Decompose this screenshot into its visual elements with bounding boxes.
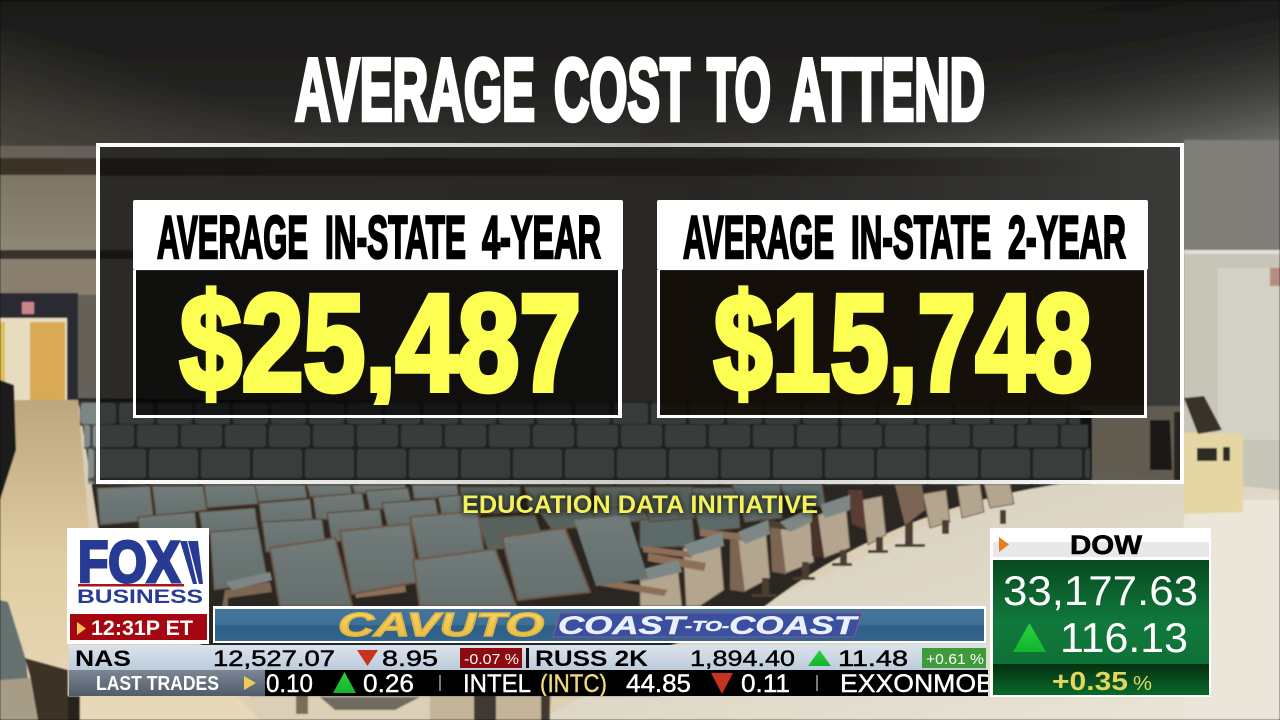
seat arm rests and cushions <box>220 495 850 625</box>
value: Dow percent change <box>1052 666 1152 696</box>
seats: large front rows <box>270 511 648 606</box>
ticker: last trades row: LAST TRADES <box>96 673 219 695</box>
label: average in-state 2-year: IN-STATE <box>851 204 991 271</box>
panel: dark framed overlay <box>96 143 1184 484</box>
main heading: TO <box>707 40 771 139</box>
coast-to-coast pill <box>553 612 862 640</box>
coast-to-coast pill: COAST <box>729 612 860 640</box>
business wordmark: BUSINESS <box>77 587 203 608</box>
seats: grey backs, back rows <box>97 484 825 590</box>
source credit: EDUCATION DATA INITIATIVE <box>462 491 818 519</box>
ticker: index row: 11.48 <box>838 646 908 671</box>
label: average in-state 4-year: 4-YEAR <box>482 204 601 271</box>
label: DOW: DOW <box>1070 530 1143 560</box>
label: average in-state 4-year: IN-STATE <box>325 204 466 271</box>
ticker: last trades row: 0.10 <box>266 670 313 698</box>
ticker: index row: NAS <box>75 646 131 671</box>
main heading: AVERAGE <box>295 40 535 139</box>
panel: in-state 2-year <box>657 200 1148 420</box>
ticker: last trades row: EXXONMOBIL <box>840 670 1016 698</box>
panel: in-state 4-year <box>133 200 623 420</box>
show title banner <box>213 606 986 643</box>
ticker: index row: -0.07 % <box>464 651 519 668</box>
ticker: index row: 12,527.07 <box>213 646 335 671</box>
value: Dow change: 116.13 <box>1060 614 1188 661</box>
ticker: index row: RUSS 2K <box>535 646 648 671</box>
clock bar: 12:31P ET <box>91 617 193 640</box>
panel: Dow index <box>990 528 1211 697</box>
ticker: last trades row: 0.26 <box>363 670 414 698</box>
lectern and laptop <box>1150 396 1243 514</box>
ticker: index row: +0.61 % <box>926 651 984 668</box>
coast-to-coast pill: COAST <box>558 612 646 640</box>
value: $25,487: $25,487 <box>180 267 581 420</box>
seats: tan bases on right <box>640 484 1014 606</box>
ticker: last trades row: 0.11 <box>741 670 790 698</box>
main heading: COST <box>554 40 690 139</box>
label: average in-state 2-year <box>683 204 1126 271</box>
fox wordmark: FOX <box>78 530 180 595</box>
seat: left foreground <box>0 600 80 720</box>
ticker: last trades row: 44.85 <box>626 670 691 698</box>
icon: up triangle <box>1013 623 1046 652</box>
label: average in-state 2-year: 2-YEAR <box>1008 204 1126 271</box>
ticker: last trades row <box>69 670 1016 698</box>
seat legs and side panels <box>730 485 1006 597</box>
ticker: index row: 8.95 <box>382 646 438 671</box>
value: Dow level: 33,177.63 <box>1003 567 1198 614</box>
coast-to-coast pill: -TO- <box>685 618 729 635</box>
ticker: index row: 1,894.40 <box>690 646 795 671</box>
icon: orange pointer <box>999 537 1009 552</box>
main heading <box>295 40 985 139</box>
label: average in-state 4-year <box>157 204 601 271</box>
clock bar <box>70 614 207 640</box>
ticker: last trades row: INTEL <box>463 670 531 698</box>
main heading: ATTEND <box>790 40 985 139</box>
value: Dow percent change: % <box>1133 673 1152 695</box>
logo: Fox Business with clock <box>67 528 209 644</box>
value: $15,748: $15,748 <box>714 267 1092 420</box>
seat rows behind overlay <box>78 398 1092 696</box>
source credit: EDUCATION DATA INITIATIVE <box>462 491 818 519</box>
ticker: index row <box>69 645 986 671</box>
label: average in-state 2-year: AVERAGE <box>683 204 834 271</box>
icon: searchlight beams <box>180 541 203 584</box>
cavuto wordmark: CAVUTO <box>338 606 544 643</box>
value: Dow percent change: +0.35 <box>1052 666 1128 696</box>
ticker: last trades row: (INTC) <box>540 670 607 698</box>
label: average in-state 4-year: AVERAGE <box>157 204 308 271</box>
bottom floor details <box>296 696 552 720</box>
